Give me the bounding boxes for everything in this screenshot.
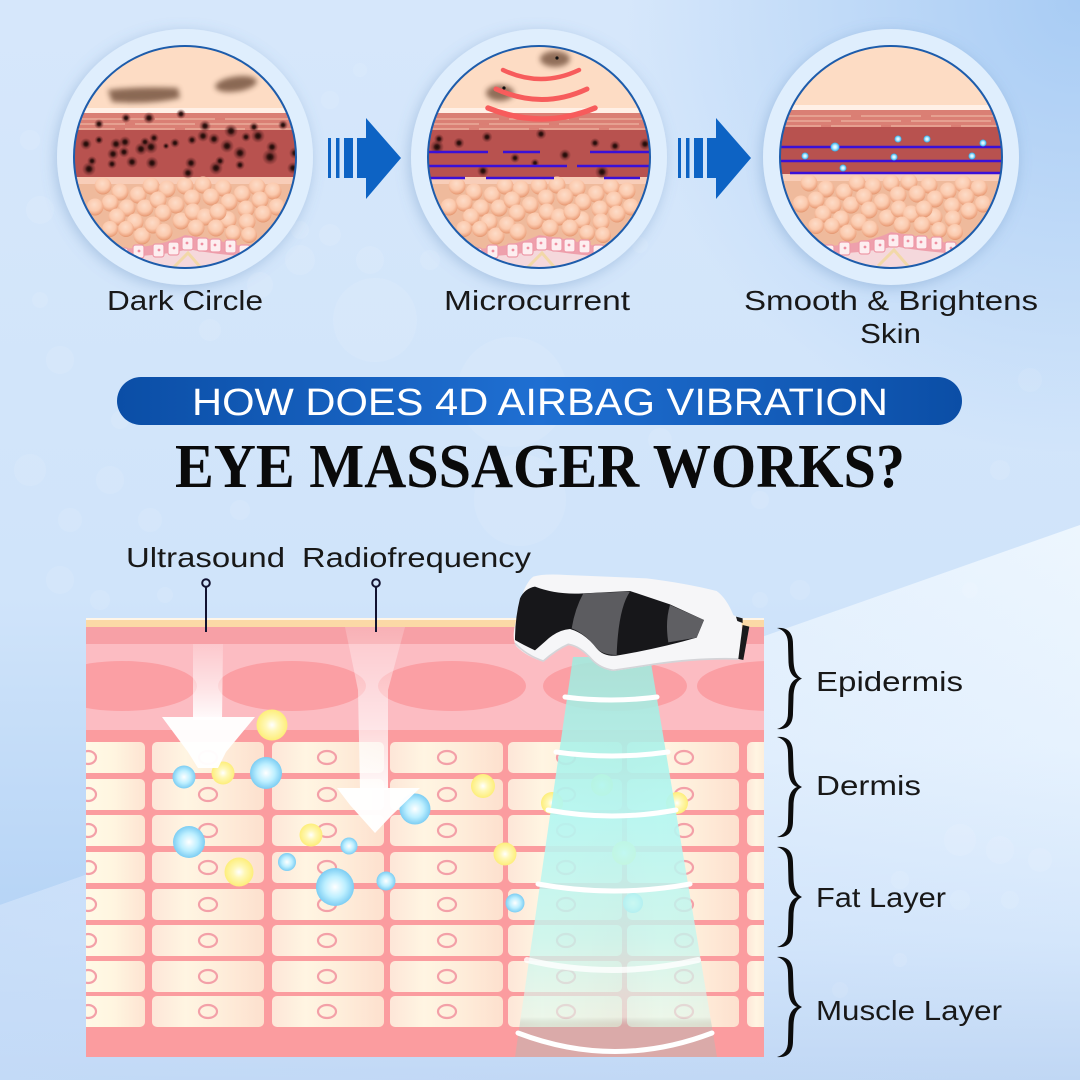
skin layer panel: [86, 618, 764, 1057]
layer label: muscle layer: [777, 957, 1002, 1057]
label: microcurrent: Microcurrent: [444, 285, 630, 316]
skin layers diagram: [47, 542, 1002, 1057]
label: dark circle: Dark Circle: [107, 285, 263, 316]
teal light beam: [515, 657, 717, 1057]
radiofrequency beam arrow: [337, 627, 420, 833]
callout: radiofrequency: Radiofrequency: [302, 542, 531, 573]
layer label: fat layer: Fat Layer: [816, 882, 946, 913]
layer label: dermis: Dermis: [816, 770, 921, 801]
callout: ultrasound: [126, 542, 285, 632]
layer label: dermis: [777, 737, 921, 837]
heading pill: [117, 377, 962, 425]
arrow: microcurrent to smooth skin: [678, 118, 751, 199]
arrow: dark circle to microcurrent: [328, 118, 401, 199]
callout: ultrasound: Ultrasound: [126, 542, 285, 573]
skin cross-section with dark pigment: [70, 42, 301, 282]
ultrasound beam arrow: [162, 644, 255, 768]
heading pill: HOW DOES 4D AIRBAG VIBRATION: [192, 382, 888, 424]
label: smooth and brightens skin: Smooth & Brightens: [744, 285, 1038, 316]
skin cross-section with current lines and waves: [424, 42, 654, 282]
panel: dark circle stage: [57, 29, 313, 316]
cell rows: [76, 742, 777, 1027]
circle frame: microcurrent: [411, 29, 667, 285]
layer label: epidermis: Epidermis: [816, 666, 963, 697]
label: smooth and brightens skin: Skin: [860, 318, 921, 349]
panel: smooth and brightens skin stage: [744, 29, 1038, 349]
label: smooth and brightens skin: [744, 285, 1038, 349]
main title: EYE MASSAGER WORKS?: [175, 433, 905, 501]
circle frame: dark circle: [57, 29, 313, 285]
eye massager device: [514, 574, 749, 671]
panel: microcurrent stage: [411, 29, 667, 316]
callout: radiofrequency: [302, 542, 531, 632]
layer label: muscle layer: Muscle Layer: [816, 995, 1002, 1026]
skin cross-section, clear with collagen lines: [776, 39, 1006, 279]
layer label: epidermis: [777, 628, 963, 729]
circle frame: smooth skin: [763, 29, 1019, 285]
bubbles: [172, 710, 688, 913]
layer label: fat layer: [777, 847, 946, 947]
